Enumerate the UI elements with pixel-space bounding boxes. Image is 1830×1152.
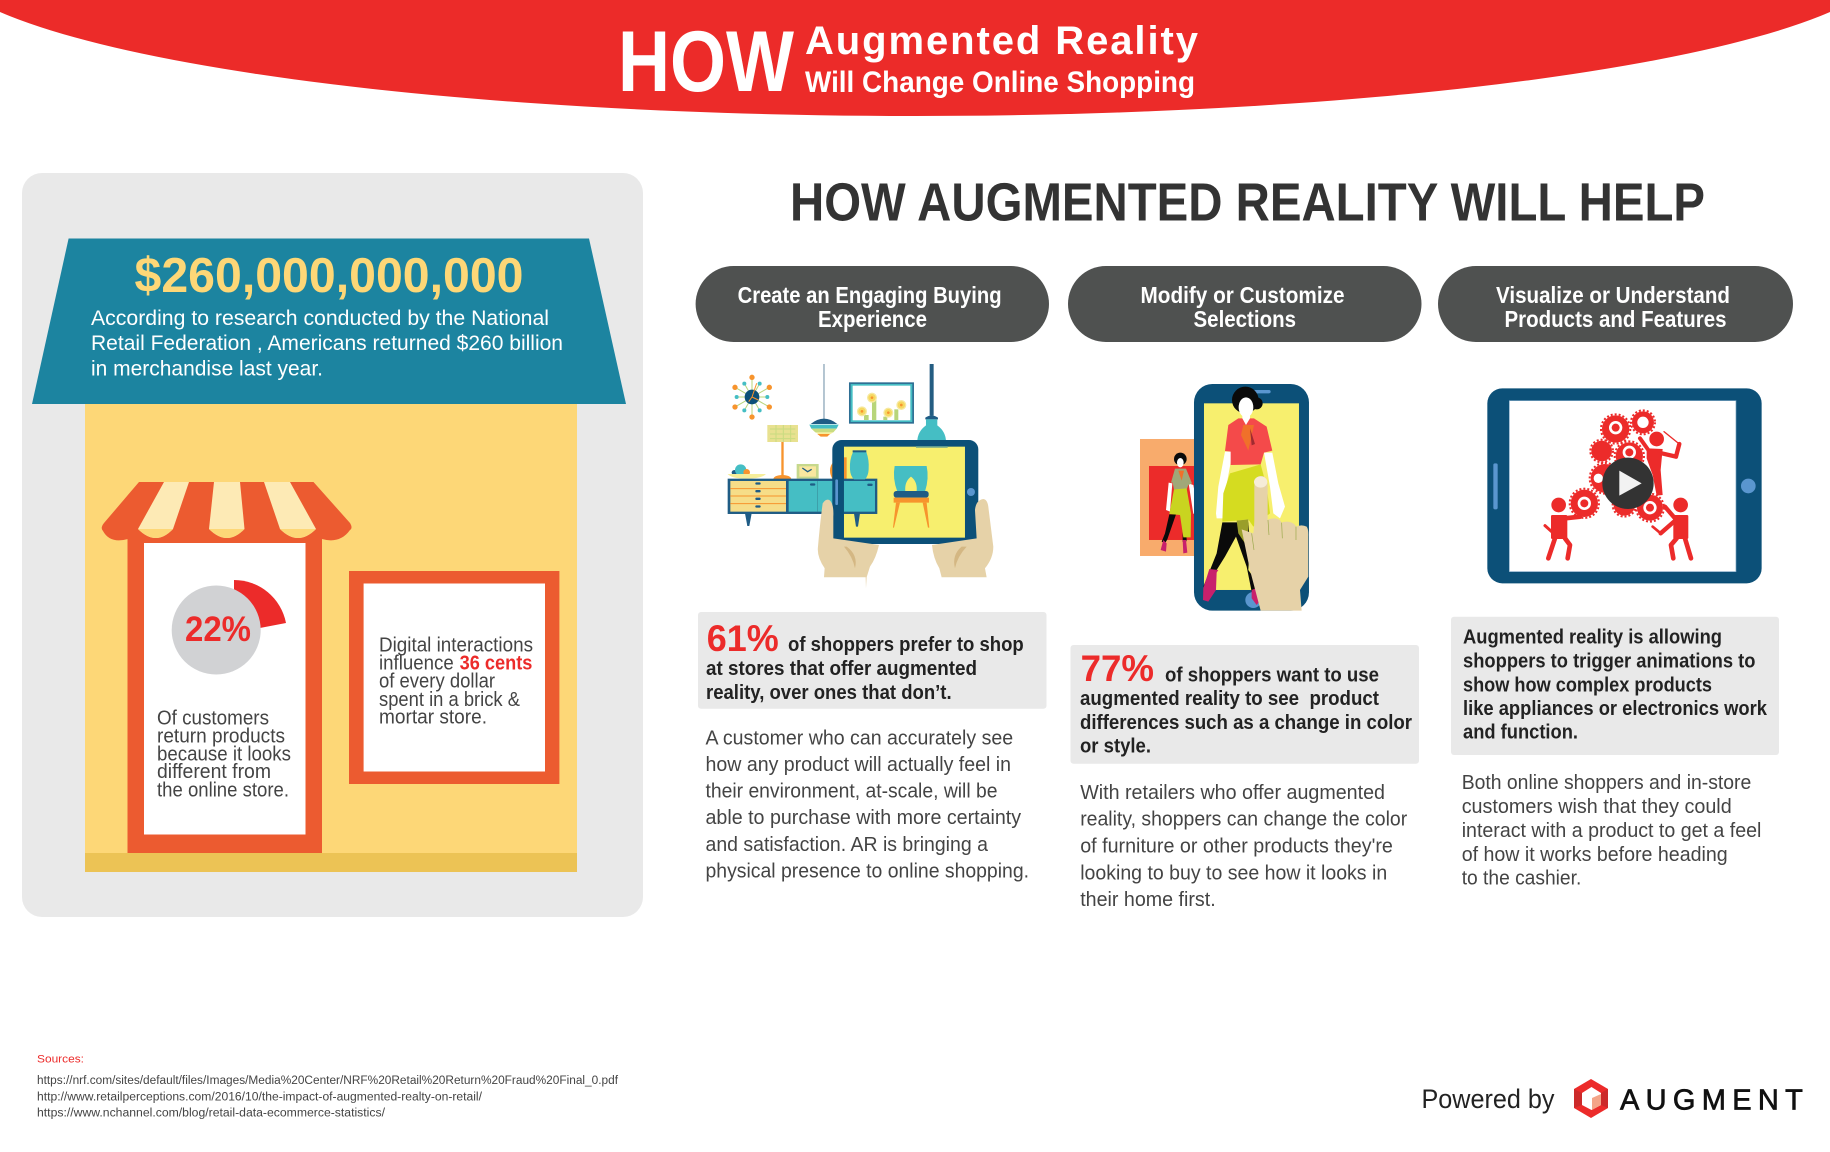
column 1: body text: able to purchase with more certainty [706, 807, 1021, 829]
sideboard [728, 479, 877, 527]
column 2: body text: reality, shoppers can change the color [1080, 809, 1408, 831]
on-screen chair [893, 466, 929, 528]
sources: https://nrf.com/sites/default/files/Images/Media%20Center/NRF%20Retail%20Return%20Fraud%20Final_0.pdf [37, 1075, 619, 1087]
column 3: body text: of how it works before heading [1462, 844, 1728, 866]
phone [1194, 384, 1309, 611]
desk clock [797, 464, 819, 479]
roof with headline [32, 238, 626, 404]
door text: because it looks [157, 743, 291, 765]
store building [85, 404, 577, 872]
title [618, 14, 1199, 110]
column 3: body text: customers wish that they could [1462, 796, 1732, 818]
pill: create an engaging buying experience: Experience [818, 306, 927, 332]
pill: create an engaging buying experience: Create an Engaging Buying [738, 282, 1002, 308]
column 2: stat box: or style. [1080, 736, 1151, 758]
left worker [1545, 498, 1580, 558]
window text: spent in a brick & [379, 689, 521, 711]
pill: visualize or understand products [1438, 266, 1793, 342]
top worker [1640, 432, 1679, 496]
background card with small figure [1140, 439, 1198, 556]
column 1: body text: how any product will actually feel in [706, 754, 1011, 776]
column 1: stat box [698, 612, 1046, 709]
column 3: body text: Both online shoppers and in-store [1462, 772, 1751, 794]
column 3: body text: to the cashier. [1462, 868, 1581, 890]
column 2: body text [1080, 782, 1408, 911]
column 1: stat box: of shoppers prefer to shop [788, 634, 1024, 656]
table lamp [767, 425, 798, 479]
column 3: body text: interact with a product to get a feel [1462, 820, 1761, 842]
door text: return products [157, 726, 285, 748]
column 3: body text [1462, 772, 1761, 890]
worker figures [1545, 432, 1691, 558]
column 3: stat box: Augmented reality is allowing [1463, 627, 1722, 649]
column 1: body text: physical presence to online shopping. [706, 861, 1029, 883]
pill: create an engaging buying experience [696, 266, 1049, 342]
window text: influence [379, 652, 454, 674]
column 2: body text: of furniture or other products they're [1080, 835, 1393, 857]
orange vase [830, 462, 849, 479]
window text: of every dollar [379, 671, 495, 693]
window frame [349, 571, 559, 784]
picture frame [849, 382, 914, 424]
window text: mortar store. [379, 706, 487, 728]
awning [102, 482, 351, 540]
door frame [128, 534, 322, 853]
pill: visualize or understand products: Products and Features [1504, 306, 1726, 332]
gears [1570, 410, 1664, 522]
door text: the online store. [157, 779, 289, 801]
column 2: body text: With retailers who offer augmented [1080, 782, 1385, 804]
big number: $260,000,000,000 [134, 249, 524, 303]
column 1: stat box: 61% [707, 618, 779, 659]
column 2: body text: their home first. [1080, 889, 1216, 911]
column 1: body text [706, 727, 1029, 883]
illustration: tablet with gears video [1487, 388, 1762, 583]
tablet [832, 440, 978, 544]
illustration: phone with outfit change [1140, 384, 1309, 611]
column 1: stat box: reality, over ones that don’t. [706, 682, 952, 704]
sources: Sources: [37, 1053, 84, 1065]
powered by augment logo [1422, 1079, 1809, 1118]
roof text: in merchandise last year. [91, 356, 323, 380]
column 3: stat box: shoppers to trigger animations to [1463, 651, 1756, 673]
main heading: HOW AUGMENTED REALITY WILL HELP [790, 172, 1705, 232]
column 2: stat box: differences such as a change in color [1080, 712, 1412, 734]
powered by augment logo: AUGMENT [1620, 1084, 1809, 1116]
ceiling lamp [917, 364, 946, 442]
column 3: stat box: and function. [1463, 722, 1578, 744]
right worker [1653, 498, 1691, 558]
sources [37, 1053, 619, 1120]
pill: visualize or understand products: Visualize or Understand [1496, 282, 1730, 308]
door text [157, 708, 291, 801]
column 1: body text: their environment, at-scale, will be [706, 781, 998, 803]
fruit bowl [728, 464, 766, 479]
pill: modify or customize selections: Modify or Customize [1140, 282, 1344, 308]
window text: 36 cents [460, 652, 532, 674]
title: Augmented Reality [805, 19, 1199, 63]
pointing hand [1242, 476, 1308, 611]
header banner [0, 0, 1830, 116]
pendant lamp [809, 364, 839, 437]
title: Will Change Online Shopping [805, 66, 1195, 99]
store base strip [85, 853, 577, 872]
roof text: Retail Federation , Americans returned $260 billion [91, 331, 563, 355]
column 2: body text: looking to buy to see how it looks in [1080, 862, 1387, 884]
tablet frame [1487, 388, 1762, 583]
panel: store statistics [22, 173, 643, 917]
hands holding tablet [818, 499, 993, 588]
column 3: stat box [1451, 617, 1779, 755]
column 2: stat box: augmented reality to see product [1080, 688, 1379, 710]
icon: augment hexagon [1574, 1079, 1608, 1118]
pie chart: 22% [172, 580, 286, 674]
roof text: According to research conducted by the National [91, 306, 549, 330]
column 2: stat box: 77% [1081, 648, 1154, 689]
window text: Digital interactions [379, 635, 533, 657]
pill: modify or customize selections: Selections [1194, 306, 1296, 332]
powered by augment logo: Powered by [1422, 1084, 1555, 1114]
sources: http://www.retailperceptions.com/2016/10/the-impact-of-augmented-realty-on-retail/ [37, 1092, 483, 1104]
large figure [1203, 387, 1285, 605]
column 1: body text: and satisfaction. AR is bringing a [706, 834, 989, 856]
column 3: stat box: like appliances or electronics work [1463, 698, 1768, 720]
sources: https://www.nchannel.com/blog/retail-data-ecommerce-statistics/ [37, 1108, 386, 1120]
play button [1602, 458, 1654, 509]
pill: modify or customize selections [1068, 266, 1422, 342]
column 2: stat box: of shoppers want to use [1165, 664, 1379, 686]
on-screen sideboard and vase [844, 450, 877, 527]
door text: different from [157, 761, 271, 783]
wall clock [732, 375, 772, 420]
title: HOW [618, 14, 795, 110]
column 1: body text: A customer who can accurately see [706, 727, 1013, 749]
window text [379, 635, 533, 728]
pie chart: 22%: 22% [185, 610, 251, 649]
door text: Of customers [157, 708, 269, 730]
column 3: stat box: show how complex products [1463, 674, 1712, 696]
roof text [91, 306, 563, 380]
illustration: furniture viewed on tablet [728, 364, 993, 588]
column 2: stat box [1070, 645, 1419, 764]
column 1: stat box: at stores that offer augmented [706, 658, 977, 680]
